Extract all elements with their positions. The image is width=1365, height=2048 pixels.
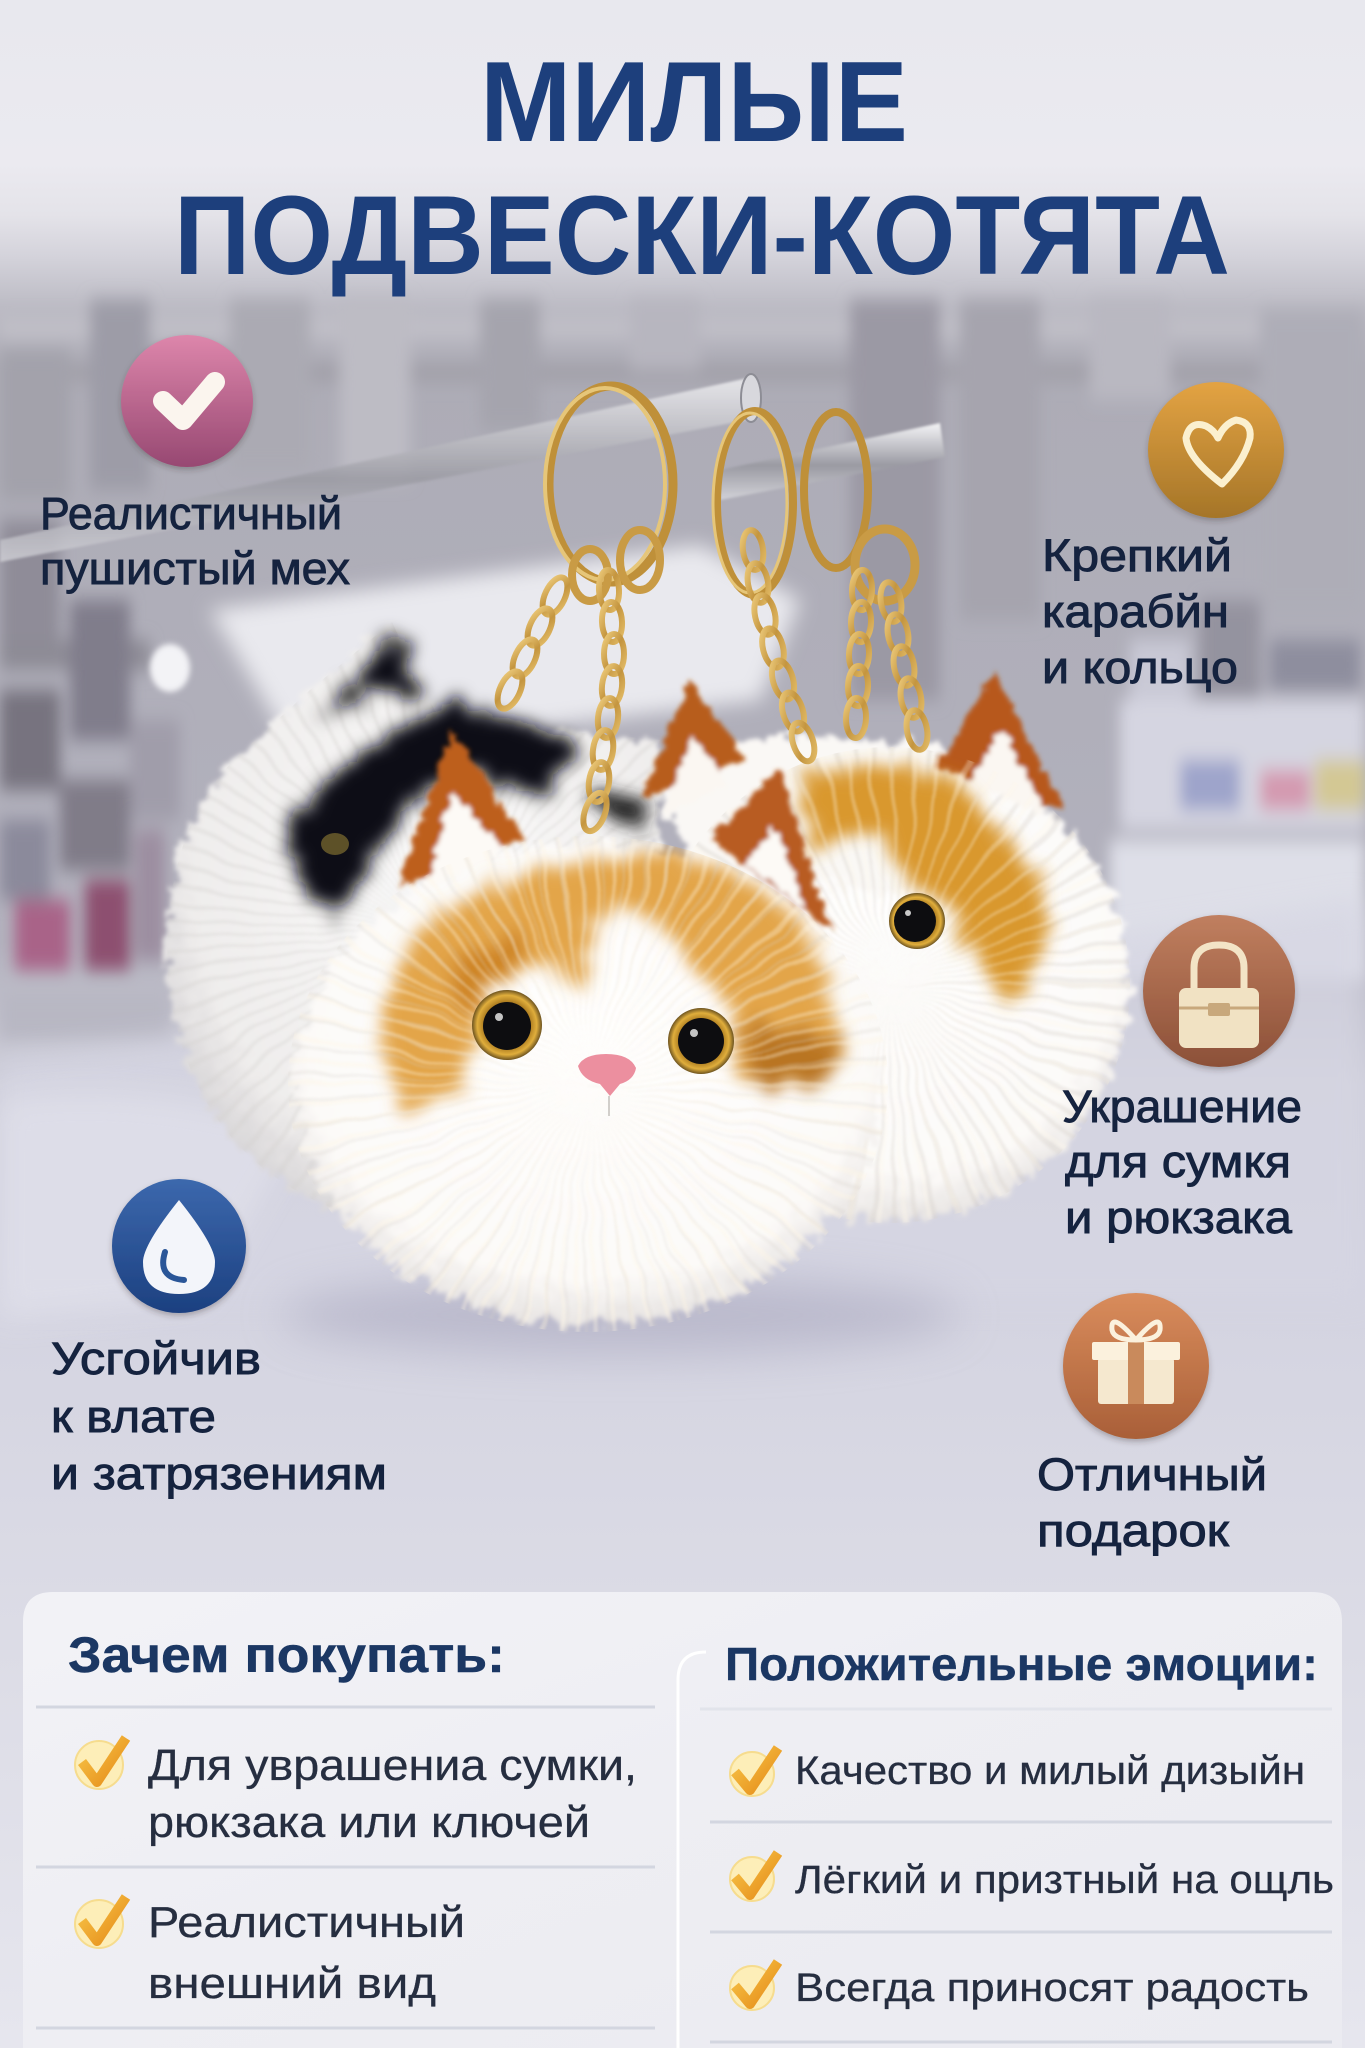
kitten: back right	[640, 672, 1128, 1220]
feature: moisture resistance: к влате	[51, 1391, 216, 1442]
chain 5	[878, 581, 930, 751]
feature: bag decoration	[1062, 915, 1302, 1243]
eye: back cat	[889, 893, 945, 949]
feature: strong carabiner: карабйн	[1042, 586, 1229, 637]
feature: moisture resistance: Усгойчив	[51, 1333, 261, 1384]
feature: strong carabiner	[1042, 382, 1284, 693]
feature: bag decoration: для сумкя	[1065, 1136, 1291, 1187]
eye: front right	[668, 1008, 734, 1074]
chain 4	[845, 570, 873, 738]
contact shadow	[280, 1275, 960, 1355]
list item: light: Лёгкий и призтный на ощль	[795, 1858, 1334, 1902]
fur patch: back cat	[750, 765, 1046, 1125]
chain 2	[579, 570, 624, 834]
icon: heart	[1148, 382, 1284, 518]
icon: water drop	[112, 1179, 246, 1313]
feature: bag decoration: и рюкзака	[1065, 1192, 1293, 1243]
section: why buy	[68, 1627, 637, 2008]
feature: great gift: Отличный	[1037, 1449, 1267, 1500]
list item: quality: Качество и милый дизыйн	[795, 1749, 1305, 1793]
section: positive emotions	[725, 1638, 1334, 2010]
feature: realistic fur: Реалистичный	[40, 488, 342, 539]
title	[174, 39, 1230, 298]
ear: back cat right	[936, 672, 1065, 815]
chain 1	[492, 574, 573, 712]
chain 3	[740, 529, 819, 764]
kitten: back left black and white	[167, 622, 660, 1215]
icon: bag	[1143, 915, 1295, 1067]
ear: front right	[710, 770, 832, 932]
section: why buy: Зачем покупать:	[68, 1627, 505, 1683]
title: МИЛЫЕ	[480, 39, 908, 166]
list item: decoration: Для уврашениа сумки,	[148, 1741, 637, 1790]
feature: moisture resistance	[51, 1179, 387, 1499]
feature: strong carabiner: Крепкий	[1042, 530, 1232, 581]
fur patch: front forehead and cheeks	[380, 855, 845, 1254]
rings and chains	[492, 386, 930, 834]
eye: front left	[472, 990, 542, 1060]
title: ПОДВЕСКИ-КОТЯТА	[174, 173, 1230, 298]
list item: decoration: рюкзака или ключей	[148, 1798, 590, 1847]
feature: bag decoration: Украшение	[1062, 1081, 1302, 1132]
panel: bottom info	[23, 1592, 1342, 2048]
list item: realistic look: внешний вид	[148, 1959, 436, 2008]
list item: realistic look	[75, 1897, 465, 2008]
icon: gift	[1063, 1293, 1209, 1439]
ear: front left	[398, 730, 524, 890]
nose	[578, 1054, 636, 1116]
feature: strong carabiner: и кольцо	[1042, 642, 1238, 693]
feature: moisture resistance: и затрязениям	[51, 1448, 387, 1499]
kitten: front	[296, 730, 880, 1324]
feature: realistic fur: пушистый мех	[40, 543, 351, 594]
list item: joy: Всегда приносят радость	[795, 1966, 1309, 2010]
metal rods	[0, 374, 945, 562]
feature: great gift	[1037, 1293, 1267, 1556]
section: positive emotions: Положительные эмоции:	[725, 1638, 1318, 1690]
feature: realistic fur	[40, 335, 351, 594]
list item: realistic look: Реалистичный	[148, 1898, 465, 1947]
icon: check	[121, 335, 253, 467]
feature: great gift: подарок	[1037, 1505, 1229, 1556]
list item: decoration	[75, 1738, 637, 1847]
ear: back cat left	[640, 680, 745, 815]
